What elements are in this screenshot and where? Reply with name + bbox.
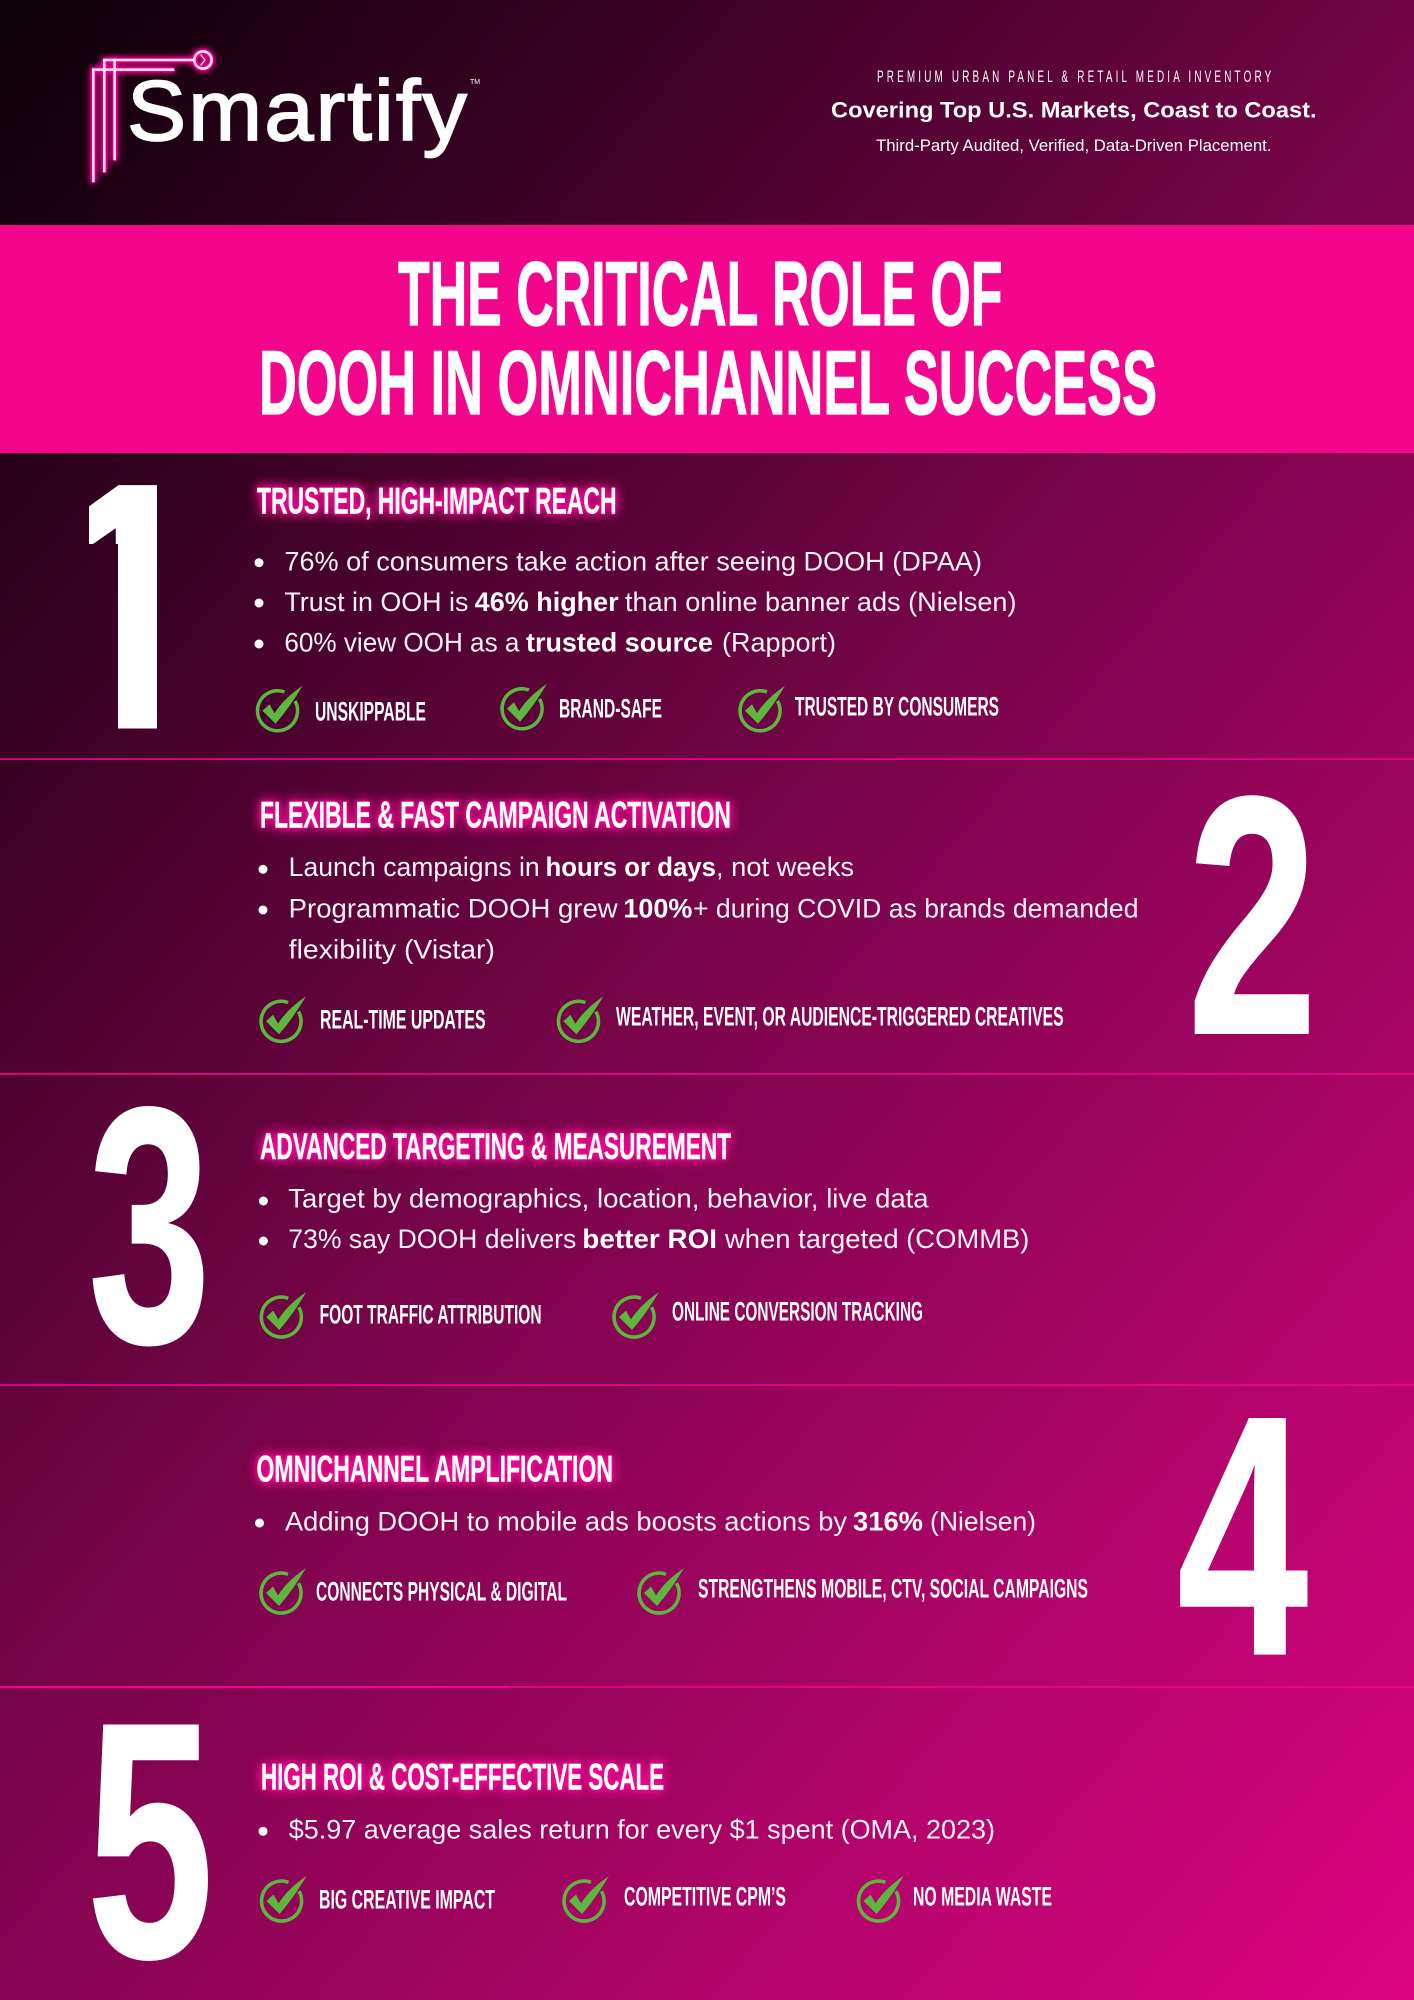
check: trusted by consumers	[740, 686, 999, 731]
tagline: coverage: Covering Top U.S. Markets, Coast to Coast.	[831, 97, 1317, 122]
bullet: trust 46%	[254, 587, 1016, 617]
bullet: trust 46%: than online banner ads (Nielsen)	[625, 587, 1016, 617]
bullet: programmatic: Programmatic DOOH grew	[289, 893, 619, 923]
bullet: 60%: 60% view OOH as a	[284, 628, 520, 658]
bullet: adding DOOH: (Nielsen)	[930, 1507, 1036, 1537]
title band	[0, 225, 1414, 453]
bullet: adding DOOH: 316%	[853, 1507, 923, 1537]
check: trusted by consumers: TRUSTED BY CONSUMERS	[795, 692, 999, 722]
check: foot traffic	[261, 1292, 542, 1337]
numeral 2: 2	[1187, 725, 1318, 1105]
bullet: 60%: trusted source	[526, 628, 713, 658]
check: strengthens campaigns	[639, 1568, 1088, 1613]
panel: section 4 omnichannel amplification	[255, 1346, 1310, 1727]
bullet: 73%: when targeted (COMMB)	[724, 1224, 1029, 1254]
checklist 1	[258, 684, 999, 731]
logo wordmark: Smartify	[127, 64, 469, 159]
panel: section 3 targeting and measurement	[88, 1038, 1029, 1414]
bullet list 3	[259, 1183, 1029, 1254]
check: no media waste	[859, 1876, 1052, 1921]
check: brand-safe	[502, 684, 662, 729]
check: triggered creatives: WEATHER, EVENT, OR AUDIENCE-TRIGGERED CREATIVES	[616, 1002, 1064, 1032]
heading 5: HIGH ROI & COST-EFFECTIVE SCALE	[261, 1755, 664, 1797]
bullet: sales return: $5.97 average sales return for every $1 spent (OMA, 2023)	[289, 1814, 995, 1844]
tagline: audited: Third-Party Audited, Verified, Data-Driven Placement.	[876, 137, 1272, 155]
numeral 4: 4	[1177, 1346, 1310, 1727]
check: brand-safe: BRAND-SAFE	[559, 694, 662, 724]
bullet: 60%: (Rapport)	[722, 628, 836, 658]
bullet: programmatic: flexibility (Vistar)	[289, 934, 495, 964]
check: strengthens campaigns: STRENGTHENS MOBILE, CTV, SOCIAL CAMPAIGNS	[698, 1574, 1088, 1604]
bullet list 5	[258, 1814, 995, 1844]
check: connects physical and digital: CONNECTS PHYSICAL & DIGITAL	[316, 1577, 567, 1607]
check: competitive CPMs: COMPETITIVE CPM’S	[624, 1881, 786, 1911]
bullet: launch	[258, 852, 854, 882]
bullet: 76%: 76% of consumers take action after seeing DOOH (DPAA)	[284, 547, 982, 577]
bullet: 73%: better ROI	[582, 1224, 717, 1254]
check: triggered creatives	[558, 996, 1064, 1041]
bullet: programmatic: 100%	[623, 893, 692, 923]
bullet list 4	[255, 1507, 1036, 1537]
check: no media waste: NO MEDIA WASTE	[913, 1881, 1052, 1911]
header band	[93, 51, 1317, 181]
check: online conversion: ONLINE CONVERSION TRACKING	[672, 1297, 923, 1327]
heading 3: ADVANCED TARGETING & MEASUREMENT	[260, 1125, 731, 1167]
bullet: 60%	[254, 628, 836, 658]
bullet: 73%	[259, 1224, 1029, 1254]
bullet: trust 46%: Trust in OOH is	[284, 587, 468, 617]
numeral 1: 1	[42, 410, 219, 803]
bullet: adding DOOH: Adding DOOH to mobile ads boosts actions by	[285, 1507, 848, 1537]
check: real-time updates	[261, 996, 486, 1041]
trademark mark: TM	[470, 79, 480, 86]
heading 1: TRUSTED, HIGH-IMPACT REACH	[257, 480, 616, 522]
check: unskippable: UNSKIPPABLE	[315, 697, 426, 727]
checklist 4	[261, 1568, 1088, 1613]
bullet: programmatic: + during COVID as brands demanded	[693, 893, 1138, 923]
title background	[0, 225, 1414, 453]
check: competitive CPMs	[564, 1876, 786, 1921]
check: real-time updates: REAL-TIME UPDATES	[320, 1005, 486, 1035]
bullet: launch: , not weeks	[716, 852, 854, 882]
check: big creative impact	[262, 1876, 495, 1921]
check: foot traffic: FOOT TRAFFIC ATTRIBUTION	[320, 1300, 542, 1330]
panel: section 5 roi and scale	[86, 1653, 1052, 2000]
bullet: programmatic	[258, 893, 1138, 964]
bullet: trust 46%: 46% higher	[475, 587, 619, 617]
bullet list 2	[258, 852, 1138, 964]
logo	[93, 51, 480, 181]
header tagline	[831, 67, 1317, 155]
panel: section 2 flexible activation	[258, 725, 1318, 1105]
check: big creative impact: BIG CREATIVE IMPACT	[319, 1885, 495, 1915]
numeral 3: 3	[88, 1038, 211, 1414]
heading 4: OMNICHANNEL AMPLIFICATION	[256, 1448, 613, 1490]
bullet: target: Target by demographics, location, behavior, live data	[288, 1183, 929, 1213]
check: unskippable	[258, 686, 426, 731]
panel: section 1 trusted reach	[42, 410, 1016, 803]
bullet: launch: hours or days	[546, 852, 716, 882]
logo neon lines	[93, 51, 212, 181]
check: online conversion	[614, 1292, 923, 1337]
tagline: inventory: PREMIUM URBAN PANEL & RETAIL MEDIA INVENTORY	[877, 67, 1271, 86]
checklist 3	[261, 1292, 923, 1337]
bullet: 73%: 73% say DOOH delivers	[288, 1224, 576, 1254]
bullet: adding DOOH	[255, 1507, 1036, 1537]
checklist 2	[261, 996, 1064, 1041]
bullet list 1	[254, 547, 1016, 658]
check: connects physical and digital	[261, 1568, 567, 1613]
bullet: launch: Launch campaigns in	[289, 852, 540, 882]
heading 2: FLEXIBLE & FAST CAMPAIGN ACTIVATION	[260, 794, 731, 836]
checklist 5	[262, 1876, 1052, 1921]
